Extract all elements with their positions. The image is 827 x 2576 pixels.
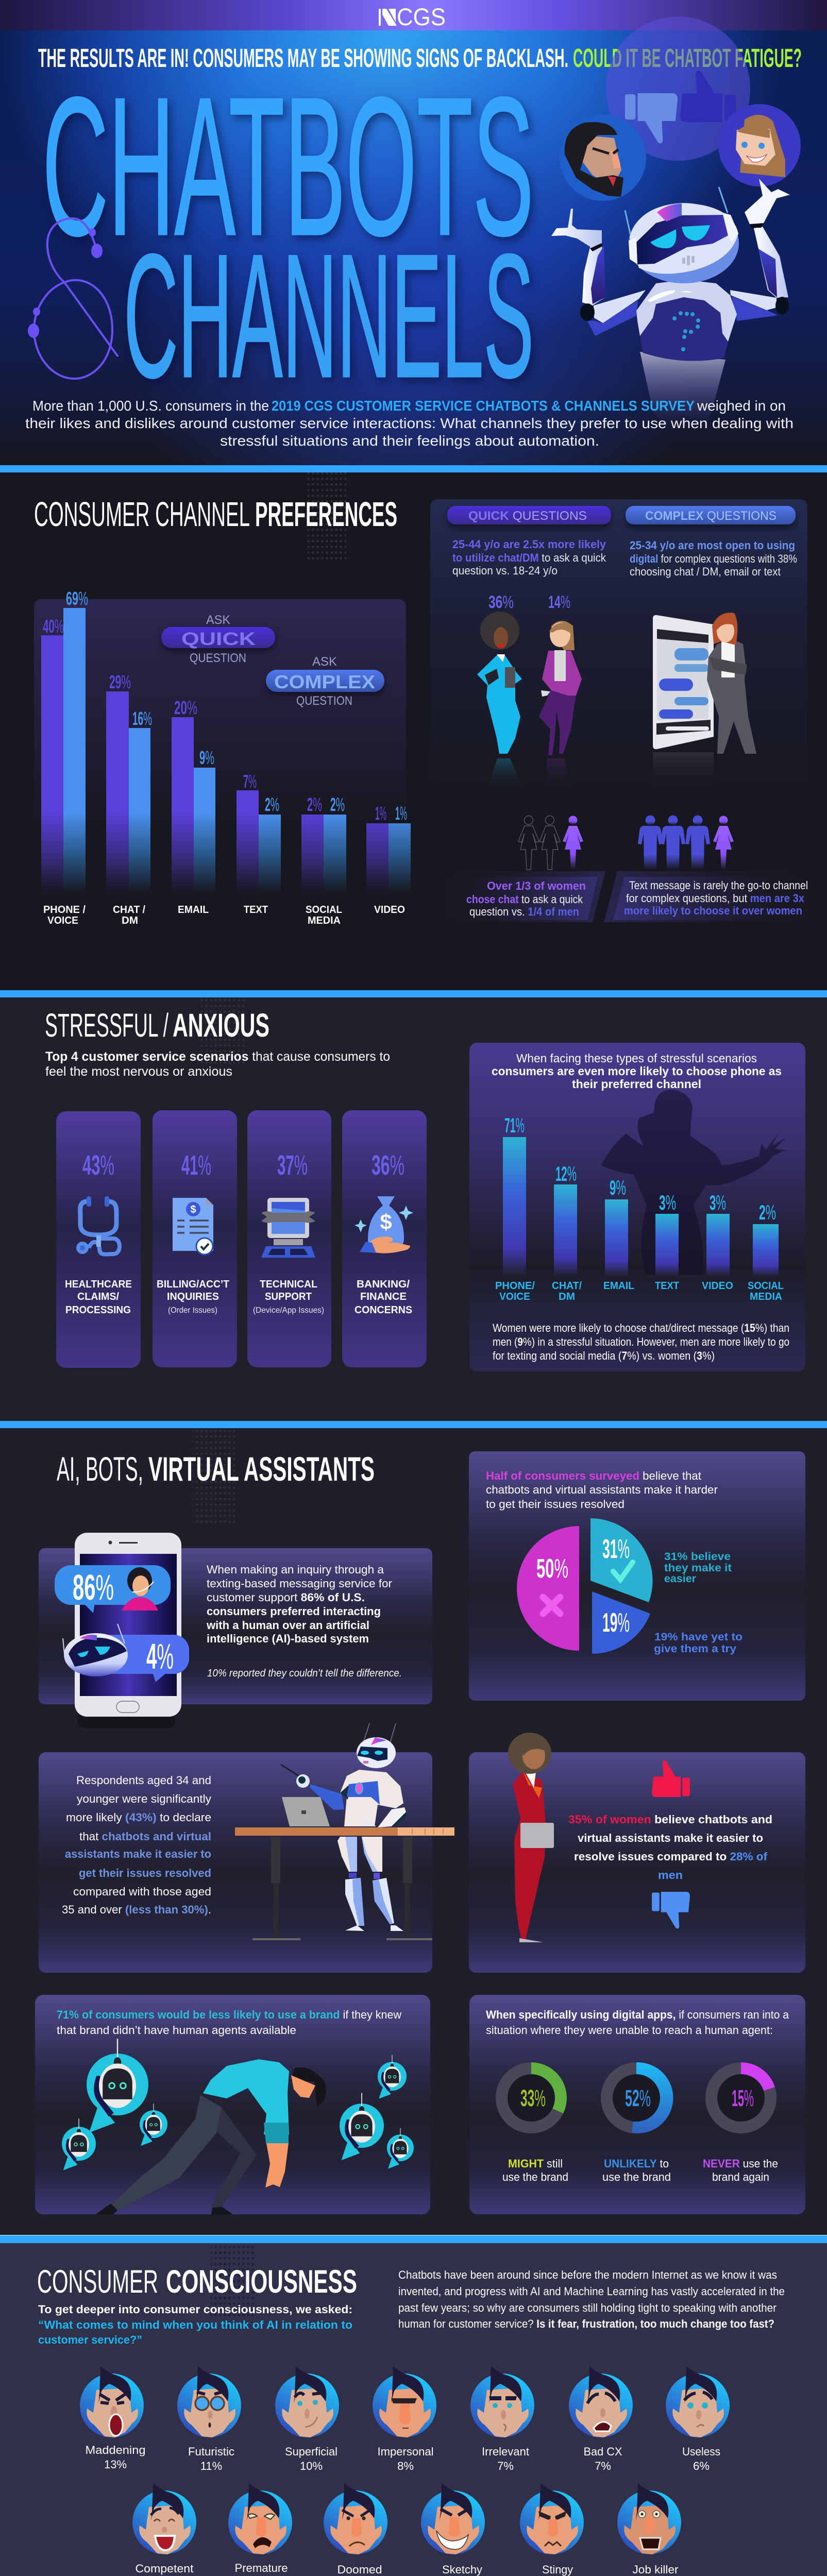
channel labels: VOICE <box>499 1291 530 1302</box>
text: complex questions stat: digital for complex questions with 38% <box>630 552 797 565</box>
illustration: woman in grey suit <box>707 613 756 754</box>
legend: ask complex question: QUESTION <box>296 694 352 708</box>
text: gender note: for texting and social media (7%) vs. women (3%) <box>493 1349 715 1362</box>
panel: quick vs complex <box>430 499 807 793</box>
legend: ask quick question: QUICK <box>181 629 256 649</box>
channel labels: MEDIA <box>308 915 341 926</box>
channel labels: TEXT <box>244 904 268 916</box>
channel labels: CHAT/ <box>552 1280 582 1292</box>
section background: channel preferences <box>0 472 827 990</box>
legend: ask quick question <box>161 613 275 665</box>
illustration: hero robot <box>551 179 790 428</box>
icon: angry man bubble <box>560 114 646 201</box>
channel labels: PHONE/ <box>495 1280 535 1292</box>
pie chart: 50% <box>536 1554 568 1584</box>
channel labels: DM <box>559 1291 575 1302</box>
text: complex questions stat: 25-34 y/o are most open to using <box>630 539 795 552</box>
legend: ask quick question: QUESTION <box>190 651 246 665</box>
text: complex questions stat <box>630 539 797 578</box>
text: age stat: 35 and over (less than 30%). <box>62 1903 211 1916</box>
callout: men text: for complex questions, but men are 3x <box>626 892 805 905</box>
face: superficial: Superficial <box>285 2445 337 2458</box>
legend: ask complex question: ASK <box>312 655 337 669</box>
callout: women chat: chose chat to ask a quick <box>466 893 583 906</box>
decorative dots <box>306 472 348 562</box>
text: age stat: Respondents aged 34 and <box>76 1774 211 1787</box>
face: useless <box>666 2366 730 2472</box>
channel labels: MEDIA <box>750 1291 782 1302</box>
text: 71 percent: that brand didn’t have human agents available <box>57 2024 296 2037</box>
bars: video <box>366 823 411 893</box>
illustration: exhausted man <box>96 2059 326 2214</box>
text: 86 percent stat: with a human over an artificial <box>206 1619 369 1632</box>
divider bar <box>0 1421 827 1428</box>
panel: stressful channel choice <box>469 1043 805 1371</box>
card: billing: (Order Issues) <box>168 1306 217 1315</box>
face: premature: Premature <box>235 2562 288 2574</box>
pie chart: 31% <box>602 1534 630 1564</box>
illustration: woman in red suit <box>508 1733 554 1942</box>
card: healthcare: 43% <box>82 1150 114 1181</box>
text: age stat: compared with those aged <box>73 1885 211 1898</box>
card: technical support <box>247 1110 331 1367</box>
robot head <box>625 187 739 283</box>
face: bad CX: 7% <box>595 2460 611 2472</box>
face: sketchy: Sketchy <box>442 2563 482 2576</box>
panel title: When facing these types of stressful scenarios <box>516 1052 757 1065</box>
bars: email <box>172 717 215 893</box>
text: gender note: men (9%) in a stressful situation. However, men are more likely to go <box>493 1335 789 1348</box>
heading: AI bots virtual assistants: VIRTUAL ASSISTANTS <box>148 1450 375 1488</box>
bar values: 1% <box>395 803 407 824</box>
text: 86 percent stat: When making an inquiry through a <box>207 1563 384 1576</box>
illustration: phone <box>75 1533 181 1728</box>
card: billing: BILLING/ACC’T <box>157 1279 229 1290</box>
pie legend: they make it <box>664 1562 732 1574</box>
intro paragraph: More than 1,000 U.S. consumers in the <box>32 398 269 414</box>
text: 86 percent stat: intelligence (AI)-based system <box>207 1632 369 1645</box>
text: survey question: “What comes to mind when you think of AI in relation to <box>38 2318 352 2331</box>
text: digital apps <box>486 2008 789 2037</box>
face: maddening: 13% <box>104 2458 127 2471</box>
face: useless: Useless <box>682 2445 720 2458</box>
text: quick questions stat: to utilize chat/DM to ask a quick <box>452 551 606 564</box>
face: competent <box>132 2483 196 2576</box>
bar values: 69% <box>66 588 88 609</box>
channel labels: TEXT <box>655 1280 679 1292</box>
card: banking: CONCERNS <box>355 1304 412 1316</box>
intro paragraph: their likes and dislikes around customer service interactions: What channels they prefer to use when dealing with <box>25 415 794 431</box>
bar values <box>504 1114 776 1224</box>
panel: human vs AI <box>39 1533 432 1728</box>
channel labels: EMAIL <box>603 1280 634 1292</box>
bar values: 20% <box>174 697 197 718</box>
card: healthcare: PROCESSING <box>65 1304 131 1316</box>
bubble: 86 percent human: 86% <box>73 1567 114 1607</box>
pill: complex questions <box>626 506 796 524</box>
card: technical support: (Device/App Issues) <box>253 1306 324 1315</box>
face: stingy <box>520 2483 584 2576</box>
heading: consumer consciousness <box>37 2264 357 2300</box>
callout: women chat: question vs. 1/4 of men <box>469 905 579 918</box>
divider bar <box>0 990 827 997</box>
illustration: phone with chat bubbles <box>653 615 714 791</box>
pie legend: easier <box>664 1573 696 1585</box>
icons: men and women ratio <box>638 815 734 870</box>
callout: men text <box>604 871 827 922</box>
robot left arm <box>551 209 646 336</box>
panel: respondents aged 34 <box>39 1723 454 1973</box>
face: bad CX <box>569 2366 633 2472</box>
donut labels: use the brand <box>502 2171 568 2183</box>
bar values: 3% <box>710 1192 726 1214</box>
donut: 33 percent: 33% <box>520 2085 546 2111</box>
face: competent: Competent <box>135 2562 194 2575</box>
donut: 15 percent <box>705 2062 777 2133</box>
illustration: chat bots swarm <box>62 2039 414 2170</box>
text: half of consumers: to get their issues resolved <box>486 1498 625 1511</box>
icon: invoice: $ <box>190 1204 196 1215</box>
heading: consumer channel preferences: CONSUMER CHANNEL <box>34 495 250 534</box>
panel: less likely to use brand <box>35 1995 430 2214</box>
text: women vs men: virtual assistants make it easier to <box>578 1832 763 1844</box>
channel labels: DM <box>122 915 138 926</box>
card: billing: 41% <box>181 1150 211 1181</box>
callout: men text: more likely to choose it over women <box>624 904 802 917</box>
bar values: 7% <box>243 771 257 792</box>
pie chart: 19% <box>602 1608 630 1638</box>
illustration: laptop <box>282 1797 330 1826</box>
heading: AI bots virtual assistants: AI, BOTS, <box>57 1450 143 1488</box>
heading: stressful anxious: STRESSFUL / <box>45 1007 168 1044</box>
CGS logo <box>379 3 446 30</box>
text: chatbots history: human for customer service? Is it fear, frustration, too much change too fast? <box>398 2317 774 2330</box>
text: gender note: Women were more likely to choose chat/direct message (15%) than <box>493 1321 789 1334</box>
face: job killer: Job killer <box>633 2563 678 2576</box>
section background: stressful <box>0 997 827 1421</box>
text: 86 percent stat: 10% reported they couldn’t tell the difference. <box>207 1668 402 1679</box>
decorative dots <box>211 2243 254 2318</box>
pie legend: 31% believe <box>664 1551 731 1563</box>
icon: money bag: $ <box>380 1210 392 1234</box>
face: premature <box>228 2483 292 2576</box>
legend: ask quick question: ASK <box>206 613 230 627</box>
donut labels: MIGHT still <box>508 2157 563 2170</box>
donut: 33 percent <box>496 2062 567 2133</box>
pill: quick questions <box>447 506 611 524</box>
bar values: 3% <box>659 1192 676 1214</box>
face: superficial: 10% <box>300 2460 323 2472</box>
callout: men text: Text message is rarely the go-to channel <box>629 879 808 892</box>
channel labels <box>43 904 405 926</box>
donut: 52 percent: 52% <box>625 2085 651 2111</box>
illustration: robot at desk <box>281 1723 407 1931</box>
channel labels: VOICE <box>47 915 78 926</box>
bar values: 9% <box>610 1177 626 1199</box>
illustration: woman in blue <box>477 612 525 791</box>
text: chatbots history <box>398 2268 785 2330</box>
channel labels: PHONE / <box>43 904 86 916</box>
text: women vs men: 35% of women believe chatbots and <box>568 1813 772 1826</box>
face: bad CX: Bad CX <box>583 2445 622 2458</box>
face: irrelevant: Irrelevant <box>482 2445 529 2458</box>
pie chart <box>517 1518 653 1654</box>
text: women vs men <box>568 1813 772 1882</box>
card: technical support: 37% <box>277 1150 308 1181</box>
decorative dots <box>193 1428 236 1523</box>
panel title: consumers are even more likely to choose phone as <box>492 1064 782 1078</box>
heading: consumer channel preferences: PREFERENCES <box>255 495 397 534</box>
bar values: 2% <box>330 794 345 815</box>
text: quick questions stat: 25-44 y/o are 2.5x more likely <box>452 538 606 551</box>
illustration: desk <box>235 1827 454 1940</box>
donut labels: use the brand <box>602 2171 671 2183</box>
face: maddening <box>80 2366 145 2471</box>
card: banking: FINANCE <box>360 1291 407 1302</box>
face: stingy: Stingy <box>542 2563 573 2576</box>
section background: hero <box>0 0 827 465</box>
bars: phone voice <box>41 608 86 893</box>
text: gender note <box>493 1321 789 1362</box>
face: doomed <box>324 2483 387 2576</box>
face: futuristic: Futuristic <box>188 2445 234 2458</box>
text: half of consumers: chatbots and virtual assistants make it harder <box>486 1483 718 1496</box>
bar values: 9% <box>199 747 214 768</box>
donut: 15 percent: 15% <box>732 2085 754 2111</box>
text: survey question <box>38 2303 352 2346</box>
card: billing: INQUIRIES <box>167 1291 219 1302</box>
illustration: floating opinion bubbles <box>560 16 801 201</box>
bars: chat dm <box>106 691 150 893</box>
face: impersonal: 8% <box>397 2460 414 2472</box>
bars: social media <box>301 815 346 893</box>
panel: digital apps donuts <box>469 1995 805 2214</box>
heading: AI bots virtual assistants <box>57 1450 375 1488</box>
panel title <box>492 1052 782 1091</box>
text: complex questions stat: choosing chat / DM, email or text <box>630 565 781 578</box>
donut labels: UNLIKELY to <box>604 2157 669 2170</box>
bar values: 2% <box>307 794 322 815</box>
bar values: 1% <box>375 803 386 824</box>
text: 86 percent stat: consumers preferred interacting <box>207 1605 381 1618</box>
card: billing <box>153 1110 237 1367</box>
icon: money bag <box>355 1196 413 1253</box>
card: banking: BANKING/ <box>357 1279 410 1290</box>
heading: stressful anxious: ANXIOUS <box>173 1007 269 1044</box>
face: impersonal: Impersonal <box>377 2445 434 2458</box>
panel: chart backdrop <box>34 599 406 826</box>
text: age stat: that chatbots and virtual <box>79 1830 211 1843</box>
channel labels <box>495 1280 784 1302</box>
icon: thumbs down <box>652 1892 690 1928</box>
channel labels: EMAIL <box>178 904 209 916</box>
text: half of consumers: Half of consumers surveyed believe that <box>486 1469 701 1482</box>
text: survey question: customer service?” <box>38 2333 142 2346</box>
text: women vs men: men <box>658 1869 683 1882</box>
text: top 4 scenarios: feel the most nervous or anxious <box>45 1064 232 1079</box>
bar values: 29% <box>109 671 131 692</box>
channel labels: VIDEO <box>374 904 405 916</box>
divider bar <box>0 465 827 472</box>
channel labels: CHAT / <box>113 904 145 916</box>
channel labels: SOCIAL <box>306 904 342 916</box>
face: futuristic: 11% <box>200 2460 222 2472</box>
intro paragraph: 2019 CGS CUSTOMER SERVICE CHATBOTS & CHANNELS SURVEY <box>272 398 695 414</box>
icon: invoice <box>173 1198 213 1255</box>
card: banking <box>342 1110 427 1367</box>
text: age stat: more likely (43%) to declare <box>66 1811 211 1824</box>
bar chart: stressful preference <box>503 1137 779 1276</box>
text: quick questions stat <box>452 538 606 577</box>
panel: women vs men <box>469 1733 805 1973</box>
illustration: woman in purple <box>539 621 582 791</box>
robot body <box>281 1765 407 1827</box>
decorative dots <box>201 997 244 1064</box>
icon: thumbs up <box>652 1760 690 1797</box>
donut labels: brand again <box>712 2171 769 2183</box>
text: 86 percent stat: texting-based messaging service for <box>207 1577 392 1590</box>
bar values: 71% <box>504 1114 525 1137</box>
robot lower body <box>640 352 725 428</box>
text: 86 percent stat <box>206 1563 402 1679</box>
icon: thumbs bubble <box>606 16 750 161</box>
legend: ask complex question <box>266 655 384 708</box>
robot right arm <box>730 179 790 321</box>
bar values: 2% <box>265 794 279 815</box>
face: irrelevant <box>470 2366 534 2472</box>
card: technical support: SUPPORT <box>265 1291 312 1302</box>
icon: computer and wrench <box>261 1198 315 1258</box>
robot legs <box>337 1837 403 1931</box>
face: impersonal <box>373 2366 436 2472</box>
bubble: 86 percent human <box>55 1565 171 1613</box>
text: age stat <box>62 1774 211 1916</box>
pill: quick questions: QUICK QUESTIONS <box>468 509 587 523</box>
title: ampersand stethoscope <box>28 218 118 379</box>
text: age stat: assistants make it easier to <box>65 1848 211 1860</box>
pie legend: give them a try <box>654 1643 736 1655</box>
donut labels <box>502 2157 778 2183</box>
pie legend <box>654 1551 742 1655</box>
bubble: 4 percent AI <box>63 1624 189 1682</box>
intro paragraph: stressful situations and their feelings about automation. <box>220 433 599 449</box>
face: irrelevant: 7% <box>497 2460 514 2472</box>
heading: consumer consciousness: CONSCIOUSNESS <box>166 2264 357 2300</box>
legend: ask complex question: COMPLEX <box>274 671 375 692</box>
text: age stat: get their issues resolved <box>79 1867 211 1879</box>
bar values: 12% <box>555 1163 577 1185</box>
text: chatbots history: past few years; so why are consumers still holding tight to speaking with another <box>398 2301 777 2314</box>
text: age stat: younger were significantly <box>77 1792 211 1805</box>
bubble: 4 percent AI: 4% <box>146 1636 174 1676</box>
text: top 4 scenarios: Top 4 customer service scenarios that cause consumers to <box>45 1049 390 1064</box>
robot torso <box>636 280 737 361</box>
text: half of consumers <box>486 1469 718 1511</box>
panel: half of consumers <box>469 1451 805 1701</box>
bar values: 2% <box>759 1201 776 1224</box>
face: sketchy <box>421 2483 485 2576</box>
text: quick questions stat: question vs. 18-24 y/o <box>452 564 558 577</box>
bar values: 40% <box>43 616 64 637</box>
callout: women chat <box>428 871 605 922</box>
face: doomed: Doomed <box>337 2563 382 2576</box>
divider bar <box>0 2235 827 2243</box>
bars: text <box>237 790 281 893</box>
face: job killer <box>617 2483 681 2576</box>
text: women vs men: resolve issues compared to 28% of <box>574 1850 768 1863</box>
card: healthcare <box>56 1111 141 1368</box>
card: healthcare: CLAIMS/ <box>77 1291 119 1302</box>
donut: 52 percent <box>601 2062 673 2133</box>
heading: consumer consciousness: CONSUMER <box>37 2264 158 2300</box>
header band <box>0 0 827 30</box>
pill: complex questions: COMPLEX QUESTIONS <box>645 509 777 523</box>
text: 71 percent: 71% of consumers would be less likely to use a brand if they knew <box>57 2008 401 2021</box>
text: chatbots history: Chatbots have been around since before the modern Internet as we know it was <box>398 2268 777 2281</box>
card: banking: 36% <box>372 1150 404 1181</box>
icons: women ratio <box>518 816 583 870</box>
text: top 4 scenarios <box>45 1049 390 1079</box>
channel labels: VIDEO <box>702 1280 733 1292</box>
icon: stethoscope <box>76 1196 120 1255</box>
card: healthcare: HEALTHCARE <box>65 1279 132 1290</box>
bar values <box>43 588 407 824</box>
card: technical support: TECHNICAL <box>260 1279 317 1290</box>
icon: smiling woman bubble <box>718 104 801 187</box>
intro paragraph <box>25 398 794 449</box>
text: chatbots history: invented, and progress with AI and Machine Learning has vastly accelerated in the <box>398 2285 785 2298</box>
section background: consumer consciousness <box>0 2243 827 2576</box>
donut labels: NEVER use the <box>703 2157 778 2170</box>
face: maddening: Maddening <box>86 2444 145 2456</box>
face: useless: 6% <box>693 2460 710 2472</box>
text: 86 percent stat: customer support 86% of U.S. <box>207 1591 365 1604</box>
silhouette: woman on phone <box>601 1090 786 1275</box>
face: futuristic <box>177 2366 241 2472</box>
panel title: their preferred channel <box>572 1077 701 1091</box>
bar chart: channel preferences <box>41 588 411 926</box>
section background: AI bots <box>0 1428 827 2235</box>
stat: 14 percent: 14% <box>548 592 570 612</box>
CGS logo: CGS <box>397 3 446 30</box>
channel labels: SOCIAL <box>748 1280 784 1292</box>
pie legend: 19% have yet to <box>654 1631 742 1643</box>
intro paragraph: weighed in on <box>697 398 786 414</box>
text: digital apps: situation where they were unable to reach a human agent: <box>486 2024 773 2037</box>
callout: women chat: Over 1/3 of women <box>487 879 586 892</box>
robot head <box>357 1723 396 1768</box>
text: survey question: To get deeper into consumer consciousness, we asked: <box>38 2303 352 2316</box>
text: 71 percent <box>57 2008 401 2037</box>
text: digital apps: When specifically using digital apps, if consumers ran into a <box>486 2008 789 2021</box>
stat: 36 percent: 36% <box>488 592 514 612</box>
bar values: 16% <box>132 708 152 729</box>
face: superficial <box>275 2366 339 2472</box>
